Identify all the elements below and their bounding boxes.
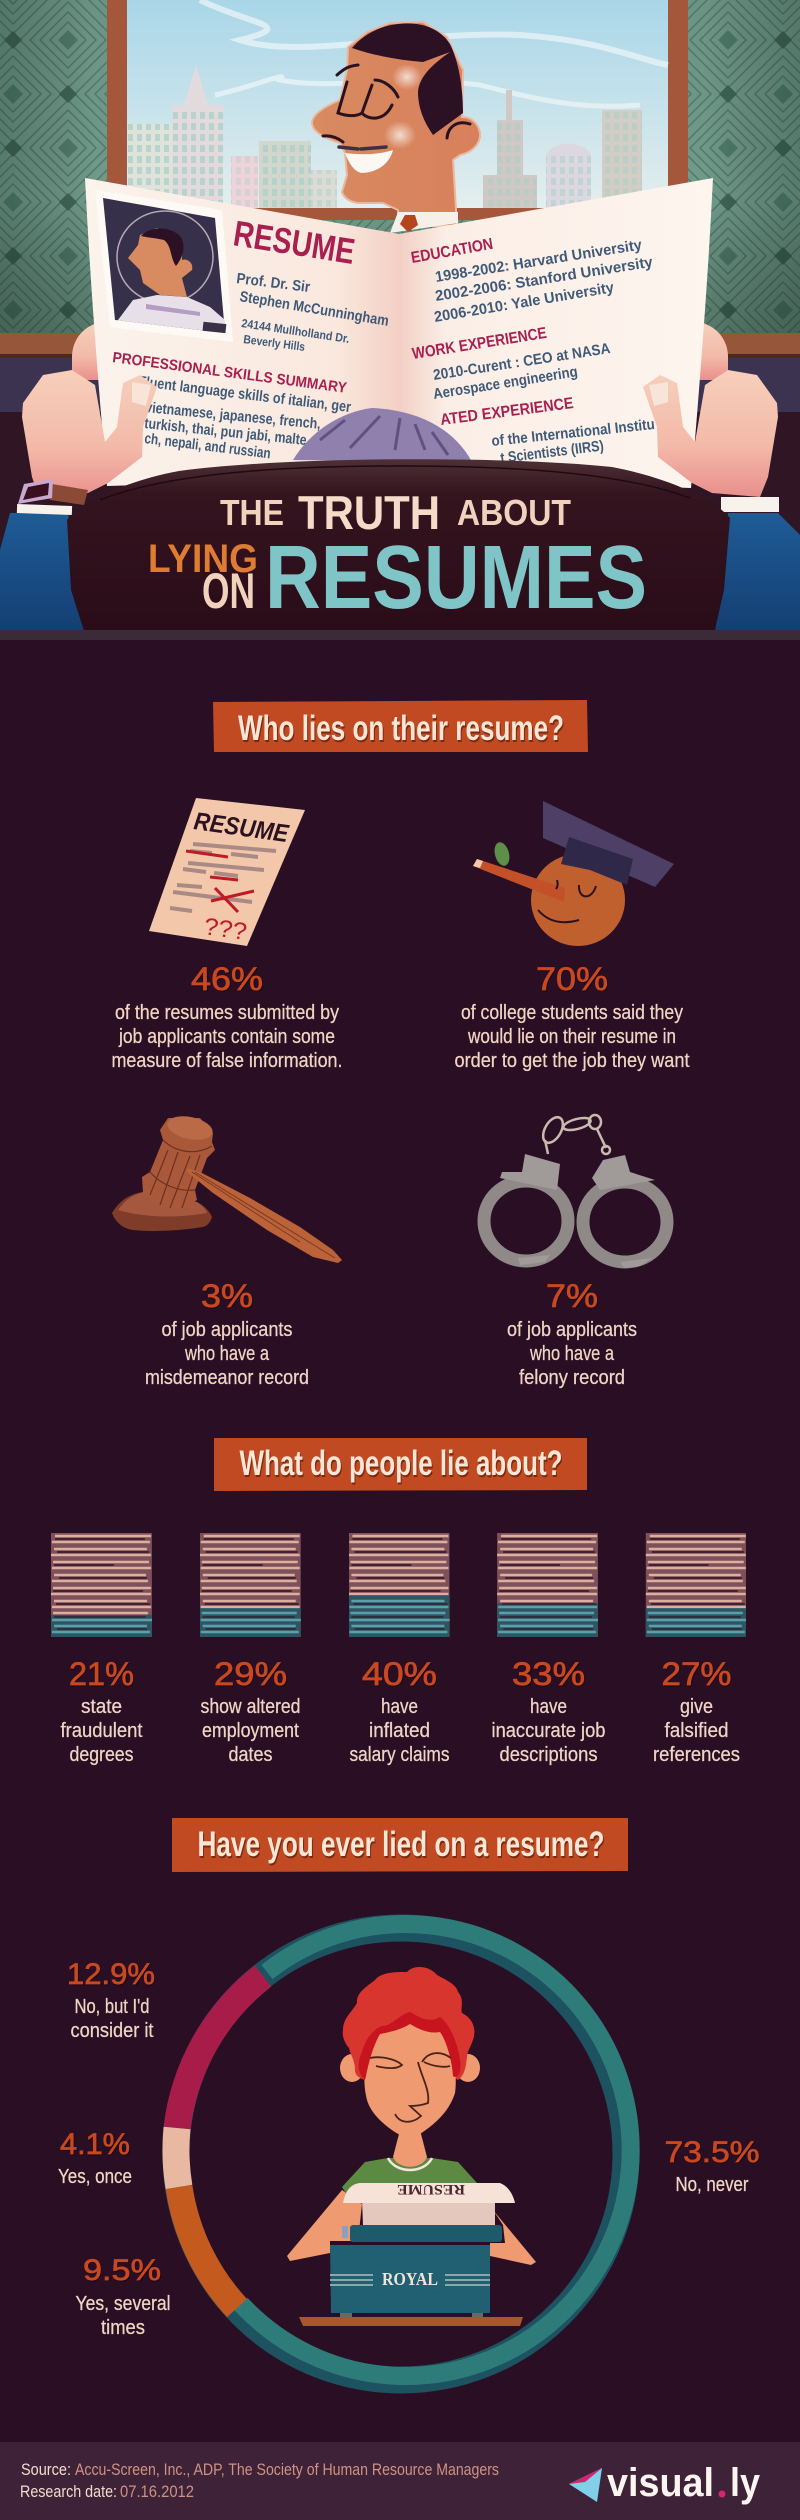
- label: 12.9%: [67, 1958, 155, 2042]
- heading banner: [214, 1438, 587, 1491]
- stat: 7%: who have a: [529, 1343, 615, 1365]
- stat: 3%: of job applicants: [162, 1319, 292, 1341]
- paper stack: 29%: [200, 1533, 301, 1637]
- stat: 70%: order to get the job they want: [454, 1050, 690, 1072]
- label: 12.9%: 12.9%: [67, 1958, 155, 1991]
- shirt: [342, 2158, 477, 2200]
- left page text: 24144 Mullholland Dr.: [241, 316, 350, 346]
- stat: 27%: references: [653, 1744, 740, 1766]
- label: 4.1%: Yes, once: [58, 2166, 132, 2188]
- left page text: ch, nepali, and russian: [144, 430, 272, 462]
- typewriter roller: [342, 2225, 502, 2242]
- left page text: Fluent language skills of italian, ger: [138, 373, 352, 416]
- right hand: [643, 370, 778, 497]
- stat: 33%: descriptions: [500, 1744, 598, 1766]
- sources: [20, 2460, 499, 2501]
- label: 12.9%: consider it: [70, 2020, 154, 2042]
- stat: 40%: salary claims: [350, 1744, 450, 1766]
- title: LYING: [148, 537, 258, 581]
- title: ABOUT: [457, 492, 571, 533]
- right page text: Aerospace engineering: [432, 363, 579, 403]
- window with sky: [107, 0, 688, 220]
- ROYAL label: ROYAL: [382, 2269, 438, 2289]
- city skyline: [128, 65, 642, 208]
- icon: marked-up resume: [149, 798, 305, 946]
- icon: marked-up resume: RESUME: [192, 807, 291, 848]
- hair: [352, 23, 463, 135]
- heading banner: Who lies on their resume?: [238, 709, 564, 748]
- stat: 70%: would lie on their resume in: [467, 1026, 676, 1048]
- right page text: 2006-2010: Yale University: [433, 279, 616, 326]
- stat: 29%: dates: [228, 1744, 272, 1766]
- armchair back: [67, 459, 730, 634]
- typewriter body: [330, 2245, 490, 2313]
- left page text: RESUME: [231, 212, 358, 272]
- curly hair: [343, 1967, 474, 2080]
- stat: 7%: felony record: [519, 1367, 625, 1389]
- stat: 46%: job applicants contain some: [118, 1026, 335, 1048]
- right page text: 2010-Curent : CEO at NASA: [432, 340, 612, 384]
- stat: 3%: 3%: [201, 1278, 253, 1314]
- stat: 46%: measure of false information.: [112, 1050, 342, 1072]
- title: RESUMES: [265, 528, 647, 628]
- paper label: RESUME: [397, 2181, 465, 2197]
- label: 4.1%: 4.1%: [60, 2128, 130, 2161]
- stat: 7%: [507, 1278, 637, 1389]
- left page text: vietnamese, japanese, french,: [145, 399, 321, 433]
- face: [364, 2024, 456, 2140]
- heading banner: [172, 1818, 628, 1872]
- hand fingers behind page: [72, 323, 728, 380]
- stat: 46%: [112, 961, 342, 1072]
- floor edge: [0, 630, 800, 640]
- stat: 33%: 33%: [512, 1656, 585, 1692]
- stat: 33%: have: [530, 1696, 567, 1718]
- arms: [287, 2190, 536, 2265]
- neck: [393, 2130, 427, 2167]
- wallpaper: [0, 0, 800, 335]
- moulding and bench wall: [0, 333, 800, 640]
- left page text: turkish, thai, pun jabi, malte: [144, 415, 307, 449]
- right page text: of the International Institu: [491, 416, 656, 450]
- collar and tie: [390, 212, 458, 233]
- stat: 7%: of job applicants: [507, 1319, 637, 1341]
- cheek highlights: [384, 64, 422, 149]
- stat: 33%: [492, 1656, 606, 1766]
- ears: [340, 2054, 480, 2082]
- stat: 21%: state: [81, 1696, 122, 1718]
- stat: 27%: 27%: [662, 1656, 732, 1692]
- reader's hair: [293, 408, 472, 462]
- right page text: 1998-2002: Harvard University: [434, 236, 644, 286]
- left page text: Beverly Hills: [243, 332, 306, 354]
- title: [148, 486, 647, 628]
- title: THE: [220, 492, 284, 533]
- sources: Accu-Screen, Inc., ADP, The Society of Human Resource Managers: [75, 2460, 499, 2479]
- visual.ly logo: [569, 2461, 761, 2505]
- stat: 7%: 7%: [546, 1278, 598, 1314]
- brand stripes: [330, 2275, 490, 2285]
- heading banner: Have you ever lied on a resume?: [198, 1825, 604, 1864]
- sources: Source:: [21, 2460, 71, 2479]
- stat: 3%: [145, 1278, 309, 1389]
- shirt collar: [388, 2158, 432, 2170]
- left page text: Stephen McCunningham: [238, 288, 390, 330]
- stat: 21%: 21%: [69, 1656, 134, 1692]
- section: have you ever lied: [58, 1818, 760, 2380]
- stat: 70%: 70%: [536, 961, 608, 997]
- section: who lies on their resume: [112, 700, 690, 1389]
- label: 4.1%: [58, 2128, 132, 2188]
- right page text: WORK EXPERIENCE: [411, 325, 548, 363]
- stat: 21%: fraudulent: [60, 1720, 143, 1742]
- mustache: [339, 147, 386, 149]
- stat: 21%: [60, 1656, 143, 1766]
- right page text: 2002-2006: Stanford University: [434, 254, 655, 305]
- icon: pinocchio graduate: [473, 801, 674, 946]
- paper roll: [343, 2181, 515, 2225]
- stat: 46%: of the resumes submitted by: [115, 1002, 339, 1024]
- label: 73.5%: 73.5%: [664, 2136, 760, 2169]
- paper stack: 40%: [349, 1533, 450, 1637]
- footer: [0, 2442, 800, 2520]
- stat: 29%: [200, 1656, 300, 1766]
- right page: [399, 178, 713, 488]
- paper stack: 21%: [51, 1533, 152, 1637]
- left hand: [22, 370, 157, 500]
- smile: [345, 150, 393, 173]
- paper stack: 33%: [497, 1533, 598, 1637]
- visual.ly logo: ly: [730, 2461, 761, 2505]
- stat: 29%: employment: [202, 1720, 299, 1742]
- label: 9.5%: times: [101, 2317, 145, 2339]
- stat: 40%: 40%: [362, 1656, 437, 1692]
- label: 73.5%: No, never: [676, 2174, 749, 2196]
- left page: [85, 178, 399, 486]
- title: TRUTH: [298, 486, 440, 539]
- right sleeve: [715, 497, 800, 633]
- stat: 27%: give: [680, 1696, 713, 1718]
- right page text: EDUCATION: [410, 236, 494, 267]
- stat: 46%: 46%: [191, 961, 263, 997]
- sources: Research date:: [20, 2482, 117, 2501]
- wrist watch: [18, 479, 88, 505]
- stat: 21%: degrees: [70, 1744, 134, 1766]
- stat: 40%: inflated: [369, 1720, 430, 1742]
- stat: 40%: have: [381, 1696, 418, 1718]
- left page text: [111, 212, 390, 462]
- stat: 29%: show altered: [200, 1696, 300, 1718]
- sources: 07.16.2012: [120, 2482, 194, 2501]
- typewriter feet: [340, 2313, 483, 2317]
- stat: 33%: inaccurate job: [492, 1720, 606, 1742]
- stat: 40%: [350, 1656, 450, 1766]
- title: ON: [202, 563, 255, 619]
- icon: gavel: [112, 1112, 342, 1263]
- label: 9.5%: 9.5%: [83, 2254, 161, 2287]
- stat: 3%: who have a: [184, 1343, 270, 1365]
- heading banner: What do people lie about?: [240, 1444, 562, 1483]
- desk: [299, 2317, 523, 2326]
- visual.ly logo: visual: [607, 2461, 714, 2505]
- photo: [95, 190, 233, 342]
- right page text: ATED EXPERIENCE: [439, 395, 575, 429]
- label: 9.5%: [76, 2254, 170, 2339]
- stat: 3%: misdemeanor record: [145, 1367, 309, 1389]
- icon: marked-up resume: ???: [202, 913, 249, 946]
- stat: 27%: falsified: [664, 1720, 728, 1742]
- heading banner: [213, 700, 588, 752]
- label: 73.5%: [664, 2136, 760, 2196]
- paper stack: 27%: [645, 1533, 746, 1637]
- ring chart: [176, 1924, 631, 2380]
- stat: 27%: [653, 1656, 740, 1766]
- hairline curls: [359, 2012, 461, 2080]
- right page text: t Scientists (IIRS): [499, 437, 605, 467]
- left page text: PROFESSIONAL SKILLS SUMMARY: [111, 349, 348, 397]
- label: 12.9%: No, but I'd: [74, 1996, 150, 2018]
- header illustration: [0, 0, 800, 640]
- left page text: Prof. Dr. Sir: [236, 270, 311, 296]
- section: what do people lie about: [51, 1438, 746, 1766]
- eyes and brows: [323, 65, 470, 142]
- left sleeve: [0, 504, 85, 633]
- face lines: [370, 2053, 451, 2122]
- icon: handcuffs: [484, 1114, 667, 1268]
- stat: 70%: of college students said they: [461, 1002, 683, 1024]
- man's head: [312, 22, 480, 233]
- stat: 70%: [454, 961, 690, 1072]
- label: 9.5%: Yes, several: [76, 2293, 170, 2315]
- open resume: [85, 178, 713, 488]
- figure at typewriter: [287, 1967, 536, 2326]
- stat: 29%: 29%: [214, 1656, 287, 1692]
- right page text: [410, 236, 656, 467]
